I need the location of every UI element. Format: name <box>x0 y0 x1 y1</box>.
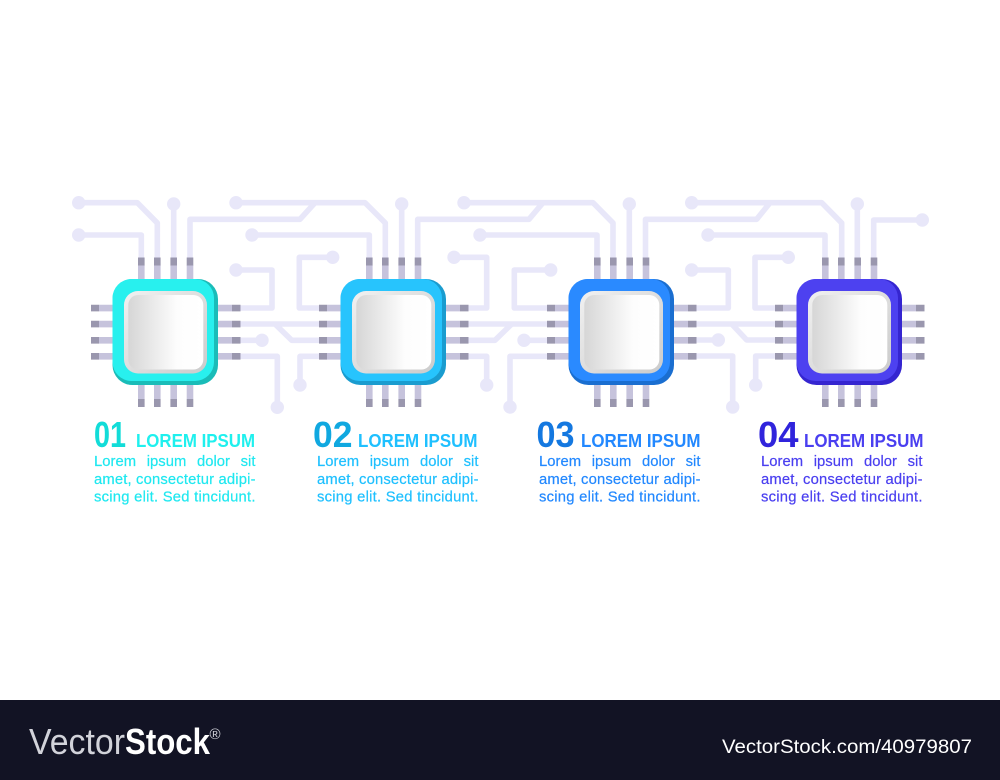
traces: top of chip 2 <box>229 196 543 258</box>
text block 02: 02 <box>313 414 352 455</box>
footer logo: Stock <box>125 721 211 762</box>
circuit traces <box>72 196 929 414</box>
footer logo: ® <box>210 726 221 743</box>
text block 04: 04 <box>758 414 799 455</box>
text block 03: LOREM IPSUM <box>581 431 700 451</box>
text block 04 <box>758 414 924 506</box>
text block 04: amet, consectetur adipi- <box>761 472 923 488</box>
text block 01: scing elit. Sed tincidunt. <box>94 490 256 506</box>
footer logo: Vector <box>29 721 125 762</box>
text block 01: 01 <box>94 414 126 455</box>
footer bar <box>0 700 1000 780</box>
text block 01: LOREM IPSUM <box>136 431 255 451</box>
text block 02: amet, consectetur adipi- <box>317 472 479 488</box>
footer image id: VectorStock.com/40979807 <box>722 737 972 758</box>
text block 02: scing elit. Sed tincidunt. <box>317 490 478 506</box>
text block 02: LOREM IPSUM <box>358 431 478 451</box>
chip 3 <box>547 258 696 407</box>
traces: between chip 3 and chip 4 <box>685 251 795 414</box>
traces: top of chip 4 <box>685 196 929 258</box>
text block 04: LOREM IPSUM <box>804 431 924 451</box>
chip 1 <box>91 258 240 407</box>
traces: between chip 2 and chip 3 <box>447 251 557 414</box>
chip 2 <box>319 258 468 407</box>
text block 02: Lorem ipsum dolor sit <box>317 454 478 470</box>
text block 03: amet, consectetur adipi- <box>539 472 701 488</box>
text block 03: 03 <box>536 414 574 455</box>
text block 04: Lorem ipsum dolor sit <box>761 454 922 470</box>
text block 01 <box>94 414 256 506</box>
text block 03 <box>536 414 701 506</box>
traces: top of chip 3 <box>457 196 770 258</box>
chip 4 <box>775 258 924 407</box>
text block 01: Lorem ipsum dolor sit <box>94 454 256 470</box>
traces: between chip 1 and chip 2 <box>229 251 339 414</box>
text block 03: Lorem ipsum dolor sit <box>539 454 700 470</box>
text block 01: amet, consectetur adipi- <box>94 472 256 488</box>
traces: top of chip 1 <box>72 196 315 258</box>
footer logo <box>29 721 221 762</box>
text block 02 <box>313 414 479 506</box>
text block 03: scing elit. Sed tincidunt. <box>539 490 700 506</box>
text block 04: scing elit. Sed tincidunt. <box>761 490 922 506</box>
